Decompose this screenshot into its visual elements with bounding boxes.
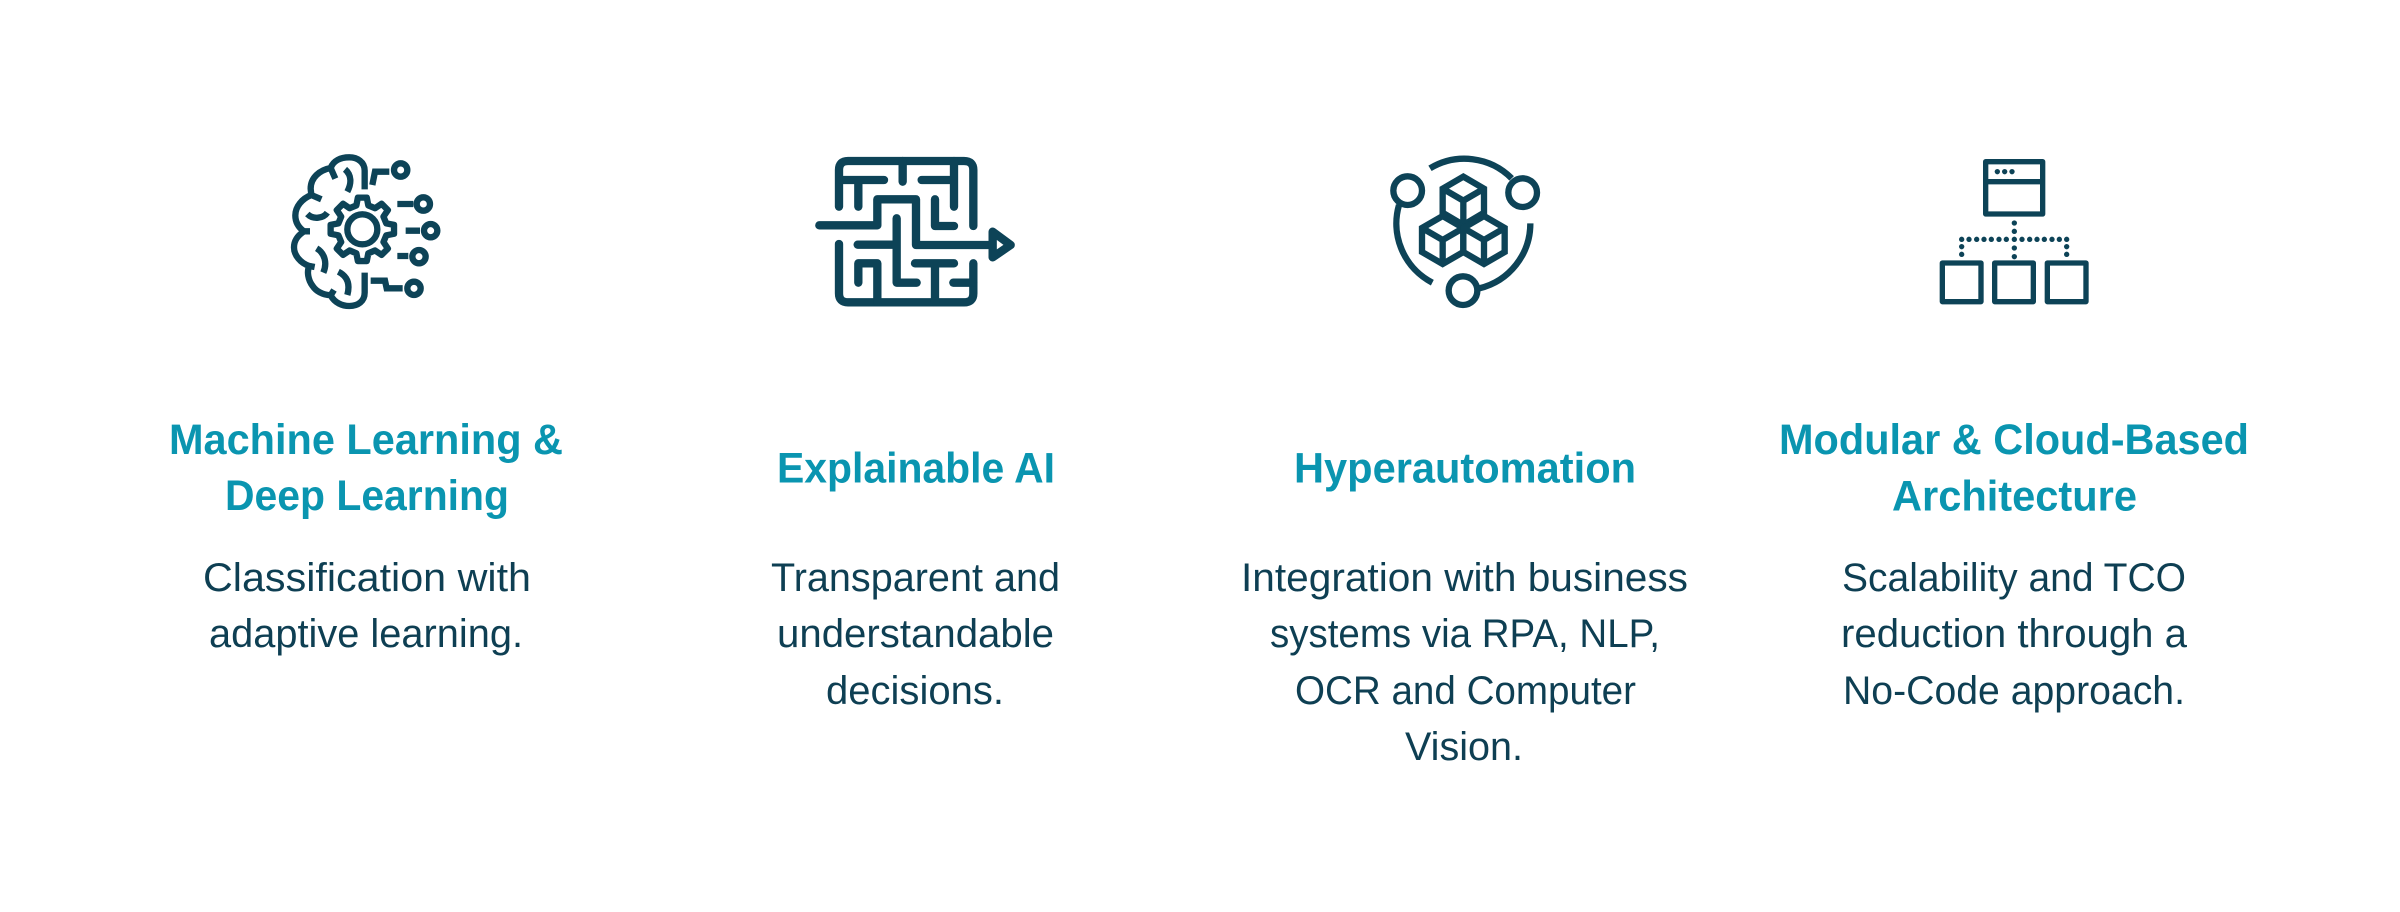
heading: machine learning: Deep Learning (225, 473, 509, 520)
text: modular architecture description: No-Code approach. (1843, 669, 2185, 713)
text: hyperautomation description: systems via RPA, NLP, (1270, 612, 1660, 656)
heading: modular architecture: Architecture (1892, 474, 2137, 520)
text: machine learning description: Classification with (203, 556, 531, 600)
text: hyperautomation description: Integration with business (1241, 556, 1688, 600)
heading: explainable AI: Explainable AI (777, 446, 1055, 492)
text: explainable AI description: decisions. (826, 669, 1004, 713)
text: machine learning description: adaptive learning. (209, 612, 523, 656)
icon: window connected to three modules (1942, 162, 2086, 302)
heading: modular architecture: Modular & Cloud-Based (1779, 417, 2249, 464)
text: modular architecture description: reduction through a (1841, 612, 2188, 656)
icon: cubes in circular orbit (1393, 159, 1537, 305)
heading: hyperautomation: Hyperautomation (1294, 446, 1636, 492)
icon: maze with arrow (819, 161, 1011, 302)
text: hyperautomation description: OCR and Computer (1295, 669, 1636, 713)
panel: machine learning and deep learning (169, 157, 563, 656)
text: hyperautomation description: Vision. (1405, 725, 1523, 769)
heading: machine learning: Machine Learning & (169, 417, 563, 464)
text: explainable AI description: understandable (777, 612, 1054, 656)
panel: explainable AI (771, 161, 1060, 713)
text: explainable AI description: Transparent and (771, 556, 1060, 600)
panel: hyperautomation (1241, 159, 1688, 769)
text: modular architecture description: Scalability and TCO (1842, 556, 2186, 600)
icon: brain with gear (294, 157, 437, 306)
panel: modular and cloud-based architecture (1779, 162, 2249, 713)
